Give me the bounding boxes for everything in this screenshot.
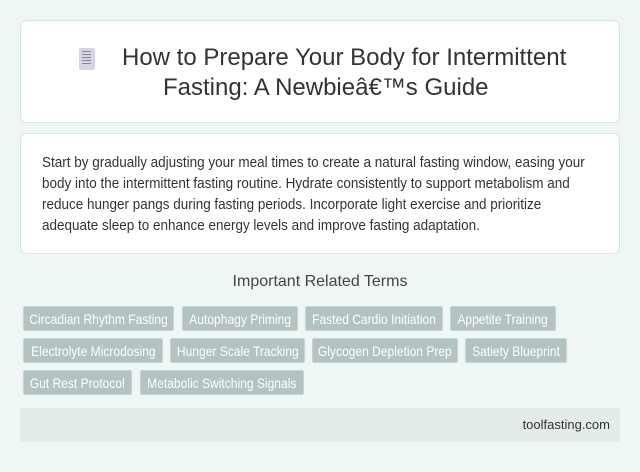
tags: Electrolyte Microdosing [31, 343, 155, 359]
tags: Glycogen Depletion Prep [318, 343, 452, 359]
title card [20, 20, 620, 123]
tags: Autophagy Priming [189, 311, 291, 327]
description text: Start by gradually adjusting your meal times to create a natural fasting window, easing your body into the intermittent fasting routine. Hydrate consistently to support metabolism and reduce hunger pangs during fasting periods. Incorporate light exercise and prioritize adequate sleep to enhance energy levels and improve fasting adaptation. [42, 155, 585, 234]
icon: document [79, 48, 95, 70]
title [122, 44, 566, 101]
footer text: toolfasting.com [523, 417, 610, 432]
tags: Appetite Training [458, 311, 548, 327]
tags: Circadian Rhythm Fasting [29, 311, 168, 327]
heading: related terms: Important Related Terms [233, 273, 407, 290]
tags: Gut Rest Protocol [30, 375, 125, 391]
footer [20, 408, 620, 442]
description card [20, 133, 620, 254]
tags: Satiety Blueprint [472, 343, 560, 359]
title: Fasting: A Newbieâ€™s Guide [163, 74, 489, 101]
title: How to Prepare Your Body for Intermittent [122, 44, 566, 71]
tags: Metabolic Switching Signals [147, 375, 297, 391]
tags: Fasted Cardio Initiation [312, 311, 436, 327]
tags: Hunger Scale Tracking [177, 343, 298, 359]
